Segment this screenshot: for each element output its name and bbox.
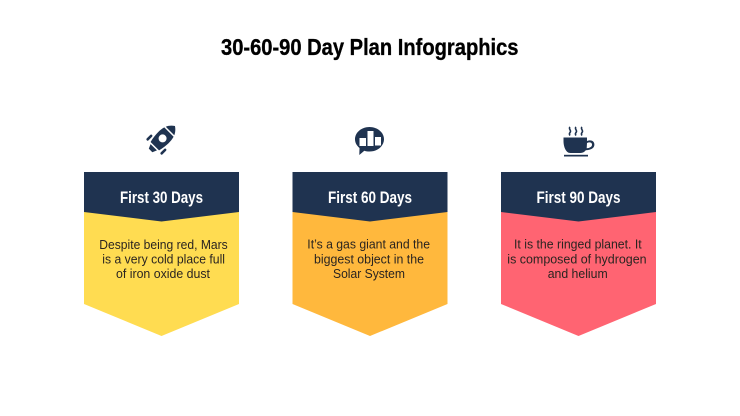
icon: coffee cup [564, 127, 594, 156]
panel: first 90 days [501, 172, 656, 336]
heading: first 60 days: First 60 Days [328, 189, 412, 207]
card body: red [501, 210, 656, 336]
text block: jupiter: biggest object in the [314, 252, 424, 266]
card header: navy [84, 172, 239, 222]
card body: yellow [84, 210, 239, 336]
card header: navy [501, 172, 656, 222]
text block: saturn: It is the ringed planet. It [514, 238, 642, 252]
card header: navy [292, 172, 448, 222]
text block: jupiter: Solar System [333, 267, 405, 281]
text block: mars: is a very cold place full [102, 253, 225, 267]
icon: rocket [143, 118, 183, 158]
panel: first 60 days [292, 172, 448, 336]
text block: mars: Despite being red, Mars [99, 238, 228, 252]
icon: chat bubble with bars [355, 127, 384, 155]
text block: saturn: and helium [548, 267, 608, 281]
heading: first 90 days: First 90 Days [536, 189, 620, 207]
text block: mars: of iron oxide dust [116, 267, 210, 281]
text block: saturn: is composed of hydrogen [507, 252, 647, 266]
text block: jupiter: It’s a gas giant and the [307, 238, 430, 252]
title: 30-60-90 Day Plan Infographics [221, 34, 518, 60]
card body: orange [292, 210, 448, 336]
heading: first 30 days: First 30 Days [120, 189, 203, 207]
panel: first 30 days [84, 172, 239, 336]
